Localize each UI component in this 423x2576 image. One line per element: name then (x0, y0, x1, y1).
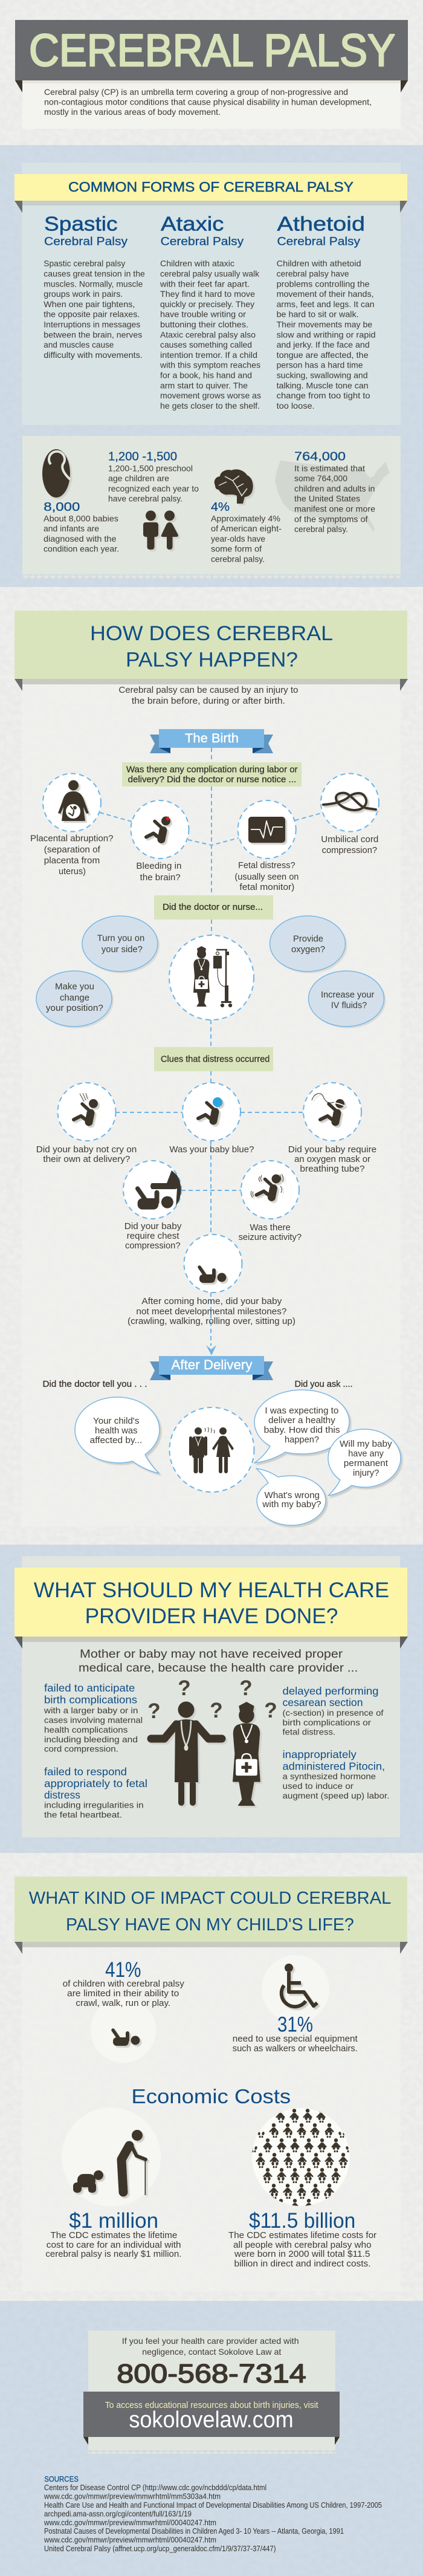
sources: Centers for Disease Control CP (http://www.cdc.gov/ncbddd/cp/data.html (44, 2484, 266, 2492)
cause: umbilical cord compression: Umbilical cord (321, 834, 378, 845)
stat: 1,200-1,500 (108, 450, 199, 504)
banner: the birth: The Birth (185, 732, 239, 745)
column: spastic: When one pair tightens, (44, 299, 135, 309)
column: ataxic: with this symptom reaches (160, 360, 260, 370)
speech bubble: will my baby: permanent (344, 1458, 389, 1468)
column: spastic: Cerebral Palsy (44, 235, 128, 248)
clue: baby blue (169, 1083, 254, 1155)
banner: after delivery (150, 1356, 273, 1380)
cost: 11.5 billion: all people with cerebral palsy who (233, 2240, 372, 2250)
speech bubble: I was expecting: I was expecting to (265, 1406, 338, 1416)
column: ataxic: Ataxic (161, 213, 224, 235)
stat: 764,000: children and adults in (294, 484, 375, 493)
column: athetoid: too loose. (277, 401, 315, 410)
icon: two children (143, 510, 178, 550)
sources: United Cerebral Palsy (affnet.ucp.org/ucp_generaldoc.cfm/1/9/37/37-37/447) (44, 2545, 276, 2553)
failure: Pitocin: inappropriately (283, 1748, 357, 1760)
failure: fetal distress: appropriately to fetal (44, 1777, 147, 1789)
question marks: ? (147, 1699, 161, 1723)
title banner (15, 20, 408, 80)
cost: 11.5 billion: billion in direct and indirect costs. (234, 2259, 371, 2269)
heading banner: HOW DOES CEREBRAL (90, 622, 333, 645)
column: ataxic (160, 213, 261, 410)
intro text: non-contagious motor conditions that cause physical disability in human development, (44, 97, 372, 106)
column: spastic: muscles. Normally, muscle (44, 279, 143, 288)
clue: developmental milestones: (crawling, walking, rolling over, sitting up) (128, 1316, 295, 1326)
heading banner (15, 611, 407, 679)
column: athetoid: be hard to sit or walk. (277, 310, 359, 319)
stat: 764,000: manifest one or more (294, 504, 375, 514)
speech bubble: your child's health (75, 1397, 160, 1473)
heading banner: PROVIDER HAVE DONE? (85, 1604, 338, 1628)
speech bubble: I was expecting: happen? (285, 1435, 319, 1445)
stat: 8,000: condition each year. (44, 544, 119, 554)
cause: placental abruption: (separation of (44, 845, 101, 855)
column: spastic: difficulty with movements. (44, 350, 143, 360)
option: provide oxygen (270, 916, 347, 973)
panel: introduction (15, 20, 408, 129)
heading: economic costs: Economic Costs (131, 2085, 291, 2107)
column: ataxic: arm start to quiver. The (160, 380, 248, 390)
column: spastic: Spastic (44, 213, 117, 235)
option: turn you on your side: your side? (102, 944, 143, 955)
option: make you change your position: Make you (55, 982, 94, 992)
sources: www.cdc.gov/mmwr/preview/mmwrhtml/mm5303a4.htm (44, 2493, 221, 2501)
option: make you change your position: change (60, 993, 89, 1003)
stat: 4% (211, 501, 282, 563)
icon: baby with bleeding (146, 816, 170, 840)
cause: bleeding in the brain: the brain? (140, 872, 181, 883)
cost: one million (45, 2209, 181, 2259)
column: athetoid (277, 213, 376, 410)
cost: one million: The CDC estimates the lifetime (51, 2230, 177, 2240)
failure: delayed cesarean: birth complications or (283, 1718, 371, 1727)
stat: 31 percent: 31% (277, 2013, 313, 2037)
stat: 41 percent (63, 1958, 184, 2008)
clue: did not cry: their own at delivery? (43, 1154, 130, 1164)
panel: statistics (22, 436, 401, 579)
icon: elder and child (73, 2130, 146, 2195)
speech bubble: will my baby (328, 1429, 401, 1496)
heading banner: PALSY HAVE ON MY CHILD'S LIFE? (66, 1915, 354, 1935)
sources: www.cdc.gov/mmwr/preview/mmwrhtml/00040247.htm (44, 2536, 216, 2545)
column: athetoid: and jerky. If the face and (277, 340, 370, 349)
column: ataxic: with their feet far apart. (160, 279, 250, 288)
failure: birth complications: cases involving maternal (44, 1715, 143, 1725)
stat: 764,000: the United States (294, 494, 360, 504)
column: athetoid: sucking, swallowing and (277, 370, 368, 380)
failure: delayed cesarean: fetal distress. (283, 1727, 335, 1736)
sources: Health Care Use and Health and Functional Impact of Developmental Disabilities Among US Children, 1997-2005 (44, 2501, 382, 2509)
option: increase your IV fluids (308, 971, 386, 1028)
question marks: ? (178, 1676, 191, 1700)
icon: blue baby (198, 1097, 222, 1122)
column: ataxic: intention tremor. If a child (160, 350, 257, 360)
stat: 4%: cerebral palsy. (211, 554, 265, 563)
column: spastic: groups work in pairs. (44, 289, 123, 299)
intro text: Cerebral palsy can be caused by an injury to (118, 685, 298, 695)
column: athetoid: talking. Muscle tone can (277, 380, 369, 390)
option: increase your IV fluids: IV fluids? (331, 1001, 367, 1011)
failure: Pitocin: administered Pitocin, (283, 1760, 385, 1773)
stat: 1,200-1,500: recognized each year to (108, 484, 199, 493)
clue: oxygen mask: breathing tube? (300, 1164, 364, 1174)
intro text: medical care, because the health care provider ... (79, 1661, 358, 1675)
icon: knotted cord (323, 793, 376, 810)
panel: contact call to action: negligence, contact Sokolove Law at (142, 2347, 281, 2357)
arrow: to after delivery (206, 1345, 216, 1355)
cause: placental abruption (30, 774, 114, 877)
column: spastic: Spastic cerebral palsy (44, 259, 125, 268)
failure: Pitocin (283, 1748, 389, 1800)
column: ataxic: causes something called (160, 340, 252, 349)
failure: birth complications: birth complications (44, 1694, 137, 1706)
stat: 764,000: 764,000 (294, 450, 346, 464)
icon: baby with oxygen mask (312, 1094, 345, 1123)
icon: baby receiving chest compression (138, 1170, 181, 1210)
stat: 41 percent: of children with cerebral palsy (63, 1979, 184, 1989)
question box: complication: Was there any complication during labor or (126, 764, 297, 775)
stat: 8,000: diagnosed with the (44, 534, 117, 543)
stat: 1,200-1,500: age children are (108, 473, 169, 483)
speech bubble: what's wrong: What's wrong (265, 1490, 320, 1501)
failure: birth complications: cord compression. (44, 1744, 118, 1753)
speech bubble: will my baby: injury? (353, 1468, 379, 1478)
clue: chest compression: Did your baby (124, 1221, 182, 1231)
cause: fetal distress: Fetal distress? (238, 860, 295, 871)
clue: oxygen mask: an oxygen mask or (294, 1154, 370, 1164)
cost: one million: $1 million (69, 2209, 158, 2233)
stat: 31 percent: such as walkers or wheelchairs. (233, 2043, 358, 2054)
stat: 764,000: some 764,000 (294, 473, 347, 483)
label: did the doctor tell you: Did the doctor tell you . . . (42, 1379, 147, 1389)
icon: mother (212, 1427, 234, 1473)
icon: doctor (189, 1427, 207, 1473)
doctor and mother (169, 1407, 254, 1492)
failure: birth complications: failed to anticipate (44, 1682, 135, 1694)
option: make you change your position: your position? (46, 1003, 103, 1013)
stat: 4%: year-olds have (211, 534, 265, 543)
failure: delayed cesarean (283, 1685, 384, 1736)
stat: 764,000: cerebral palsy. (294, 524, 348, 534)
icon: fetal monitor (248, 817, 285, 843)
speech bubble: your child's health: health was (95, 1426, 138, 1436)
icon: IV stand (213, 950, 232, 1007)
panel: how does cerebral palsy happen (15, 611, 408, 1526)
stat: 31 percent: need to use special equipment (233, 2034, 358, 2044)
cost: 11.5 billion (228, 2209, 376, 2269)
column: ataxic: quickly or precisely. They (160, 299, 254, 309)
icon: wheelchair (282, 1964, 317, 2007)
failure: delayed cesarean: (c-section) in presence of (283, 1708, 384, 1718)
icon: lying baby (199, 1267, 226, 1283)
column: ataxic: for a book, his hand and (160, 370, 252, 380)
column: ataxic: movement grows worse as (160, 391, 261, 400)
heading banner: WHAT SHOULD MY HEALTH CARE (34, 1578, 389, 1602)
icon: doctor shrugging (151, 1701, 222, 1806)
nurse with IV stand (169, 935, 254, 1020)
option: make you change your position (36, 971, 114, 1028)
cause: fetal distress: fetal monitor) (239, 882, 294, 892)
column: ataxic: Cerebral Palsy (161, 235, 244, 248)
failure: fetal distress: distress (44, 1789, 80, 1801)
cause: fetal distress (234, 800, 299, 892)
sources: www.cdc.gov/mmwr/preview/mmwrhtml/00040247.htm (44, 2519, 216, 2527)
column: athetoid: Athetoid (277, 213, 365, 235)
column: athetoid: problems controlling the (277, 279, 370, 288)
failure: fetal distress: the fetal heartbeat. (44, 1810, 122, 1820)
failure: fetal distress: failed to respond (44, 1766, 127, 1778)
stat: 8,000: About 8,000 babies (44, 513, 118, 523)
icon: baby with seizure (251, 1174, 283, 1198)
icon: baby not crying (74, 1093, 98, 1123)
failure: delayed cesarean: delayed performing (283, 1685, 378, 1697)
panel: what kind of impact (15, 1877, 408, 2291)
clue: did not cry (36, 1083, 137, 1164)
icon: brain (215, 469, 253, 504)
stat: 8,000 (44, 501, 119, 554)
clue: baby blue: Was your baby blue? (169, 1144, 254, 1155)
icon: sound arcs (205, 1427, 215, 1433)
column: athetoid: tongue are affected, the (277, 350, 369, 360)
speech bubble: I was expecting: baby. How did this (264, 1425, 340, 1435)
heading banner (15, 1568, 407, 1637)
failure: Pitocin: augment (speed up) labor. (283, 1791, 389, 1800)
panel: what should my health care provider have done (15, 1556, 408, 1837)
icon: pregnant mother (58, 780, 89, 821)
column: spastic: causes great tension in the (44, 268, 145, 278)
icon: map of the United States (275, 461, 390, 532)
icon: nurse (193, 946, 210, 1007)
column: spastic: Interruptions in messages (44, 319, 140, 329)
heading banner: WHAT KIND OF IMPACT COULD CEREBRAL (29, 1889, 391, 1908)
intro text (79, 1647, 358, 1675)
column: athetoid: Their movements may be (277, 319, 372, 329)
column: athetoid: Cerebral Palsy (277, 235, 360, 248)
title: CEREBRAL PALSY (29, 25, 395, 76)
speech bubble: what's wrong: with my baby? (262, 1499, 321, 1510)
failure: Pitocin: used to induce or (283, 1781, 354, 1791)
sources: archpedi.ama-assn.org/cgi/content/full/163/1/19 (44, 2510, 192, 2519)
column: spastic: between the brain, nerves (44, 329, 142, 339)
cost: 11.5 billion: $11.5 billion (249, 2209, 355, 2233)
column: athetoid: change from too tight to (277, 391, 370, 400)
question marks: ? (239, 1676, 253, 1700)
cause: placental abruption: placenta from (44, 855, 100, 866)
stat: 41 percent: crawl, walk, run or play. (76, 1998, 170, 2008)
question box: complication: delivery? Did the doctor or nurse notice ... (128, 774, 296, 785)
column: ataxic: buttoning their clothes. (160, 319, 248, 329)
cost: 11.5 billion: The CDC estimates lifetime costs for (228, 2230, 376, 2240)
stat: 764,000 (294, 450, 375, 534)
cause: umbilical cord compression: compression? (322, 845, 377, 855)
website banner: sokolovelaw.com (129, 2407, 294, 2433)
speech bubble: I was expecting (254, 1390, 349, 1463)
cause: placental abruption: uterus) (59, 866, 86, 877)
question box: clues (154, 1047, 273, 1071)
heading banner (15, 174, 407, 201)
flow connectors (100, 748, 321, 1346)
phone number: 800-568-7314 (117, 2359, 306, 2389)
panel: contact call to action (83, 2331, 340, 2454)
column: ataxic: have trouble writing or (160, 310, 246, 319)
column: athetoid: cerebral palsy have (277, 268, 349, 278)
option: provide oxygen: Provide (293, 934, 323, 944)
failure: fetal distress (44, 1766, 147, 1820)
column: athetoid: person has a hard time (277, 360, 363, 370)
failure: birth complications: with a larger baby or in (44, 1705, 138, 1715)
column: athetoid: slow and writhing or rapid (277, 329, 376, 339)
question box: did the doctor or nurse (154, 895, 273, 920)
stat: 1,200-1,500: have cerebral palsy. (108, 494, 182, 504)
column: athetoid: arms, feet and legs. It can (277, 299, 375, 309)
option: increase your IV fluids: Increase your (321, 990, 374, 1000)
stat: 4%: 4% (211, 501, 230, 514)
banner: after delivery: After Delivery (172, 1357, 253, 1372)
heading banner: COMMON FORMS OF CEREBRAL PALSY (68, 179, 354, 195)
clue: chest compression: require chest (127, 1231, 179, 1241)
option: turn you on your side (82, 916, 160, 973)
panel: contact call to action: If you feel your health care provider acted with (122, 2336, 299, 2346)
stat: 8,000: 8,000 (44, 501, 80, 514)
column: athetoid: movement of their hands, (277, 289, 374, 299)
column: ataxic: They find it hard to move (160, 289, 255, 299)
intro text: mostly in the various areas of body movement. (44, 107, 221, 117)
clue: chest compression (123, 1161, 182, 1251)
stat: 764,000: It is estimated that (294, 463, 365, 473)
stat: 1,200-1,500: 1,200 -1,500 (108, 450, 177, 464)
question box: did the doctor or nurse: Did the doctor or nurse... (163, 902, 263, 912)
clue: seizure activity (239, 1161, 302, 1242)
clue: did not cry: Did your baby not cry on (36, 1144, 137, 1155)
failure: delayed cesarean: cesarean section (283, 1696, 363, 1708)
column: ataxic: he gets closer to the shelf. (160, 401, 260, 410)
cause: bleeding in the brain: Bleeding in (136, 861, 181, 871)
icon: lying baby (113, 2030, 140, 2046)
question box: clues: Clues that distress occurred (161, 1054, 270, 1065)
website banner (83, 2392, 340, 2437)
stat: 31 percent (233, 2013, 358, 2054)
intro text: the brain before, during or after birth. (132, 696, 285, 706)
cause: bleeding in the brain (131, 800, 189, 883)
banner: the birth (150, 729, 273, 753)
question marks: ? (264, 1699, 277, 1722)
heading banner: PALSY HAPPEN? (126, 649, 298, 672)
cost: one million: cerebral palsy is nearly $1 million. (45, 2249, 181, 2259)
sources: Postnatal Causes of Developmental Disabilities in Children Aged 3- 10 Years -- Atlanta, Georgia, 1991 (44, 2527, 344, 2535)
cost: one million: cost to care for an individual with (47, 2240, 181, 2250)
failure: birth complications (44, 1682, 143, 1753)
question marks (147, 1676, 277, 1723)
icon: swaddled baby (42, 449, 70, 498)
clue: chest compression: compression? (125, 1241, 180, 1251)
stat: 41 percent: are limited in their ability to (67, 1988, 179, 1999)
question marks: ? (210, 1699, 223, 1722)
clue: oxygen mask: Did your baby require (288, 1144, 376, 1155)
label: did you ask: Did you ask .... (295, 1379, 353, 1389)
failure: Pitocin: a synthesized hormone (283, 1771, 376, 1781)
clue: developmental milestones: not meet developmental milestones? (136, 1306, 286, 1317)
soft backdrop circles (62, 1955, 329, 2207)
cause: placental abruption: Placental abruption? (30, 834, 114, 844)
stat: 41 percent: 41% (105, 1958, 141, 1982)
failure: birth complications: health complications (44, 1725, 128, 1734)
column: athetoid: Children with athetoid (277, 259, 361, 268)
panel: common forms of cerebral palsy (15, 163, 407, 425)
stat: 8,000: and infants are (44, 524, 99, 533)
icon: circle of people and footprints (250, 2108, 353, 2208)
column: ataxic: cerebral palsy usually walk (160, 268, 260, 278)
stat: 4%: Approximately 4% (211, 513, 280, 523)
clue: seizure activity: Was there (250, 1222, 291, 1233)
question box: complication (122, 762, 302, 787)
website banner: To access educational resources about birth injuries, visit (105, 2401, 318, 2410)
column: spastic: the opposite pair relaxes. (44, 310, 140, 319)
stat: 1,200-1,500: 1,200-1,500 preschool (108, 463, 193, 473)
option: provide oxygen: oxygen? (291, 944, 325, 955)
intro text (118, 685, 298, 706)
column: ataxic: Children with ataxic (160, 259, 234, 268)
cost: 11.5 billion: were born in 2000 will total $11.5 (234, 2249, 370, 2259)
column: ataxic: Ataxic cerebral palsy also (160, 329, 256, 339)
stat: 4%: some form of (211, 544, 262, 554)
intro text: Cerebral palsy (CP) is an umbrella term covering a group of non-progressive and (44, 87, 348, 97)
column: spastic (44, 213, 145, 360)
column: spastic: and muscles cause (44, 340, 114, 349)
heading banner (15, 1877, 407, 1942)
clue: oxygen mask (288, 1083, 376, 1174)
speech bubble: I was expecting: deliver a healthy (268, 1415, 335, 1426)
speech bubble: what's wrong (256, 1468, 326, 1525)
clue: developmental milestones: After coming home, did your baby (141, 1296, 282, 1306)
intro text (44, 87, 372, 117)
option: turn you on your side: Turn you on (97, 933, 144, 944)
icon: nurse with bag (233, 1702, 260, 1806)
failure: birth complications: including bleeding and (44, 1734, 138, 1744)
speech bubble: will my baby: Will my baby (340, 1439, 392, 1449)
speech bubble: your child's health: Your child's (93, 1416, 139, 1426)
intro text: Mother or baby may not have received proper (80, 1647, 343, 1661)
failure: fetal distress: including irregularities in (44, 1800, 144, 1810)
speech bubble: will my baby: have any (348, 1449, 384, 1459)
sources: SOURCES (44, 2474, 79, 2484)
speech bubble: your child's health: affected by... (90, 1435, 142, 1445)
cause: umbilical cord compression (321, 774, 379, 855)
cause: fetal distress: (usually seen on (234, 872, 299, 882)
clue: developmental milestones (128, 1234, 295, 1326)
stat: 4%: of American eight- (211, 524, 282, 533)
stat: 764,000: of the symptoms of (294, 514, 368, 524)
clue: seizure activity: seizure activity? (239, 1232, 302, 1242)
sources (44, 2474, 382, 2553)
